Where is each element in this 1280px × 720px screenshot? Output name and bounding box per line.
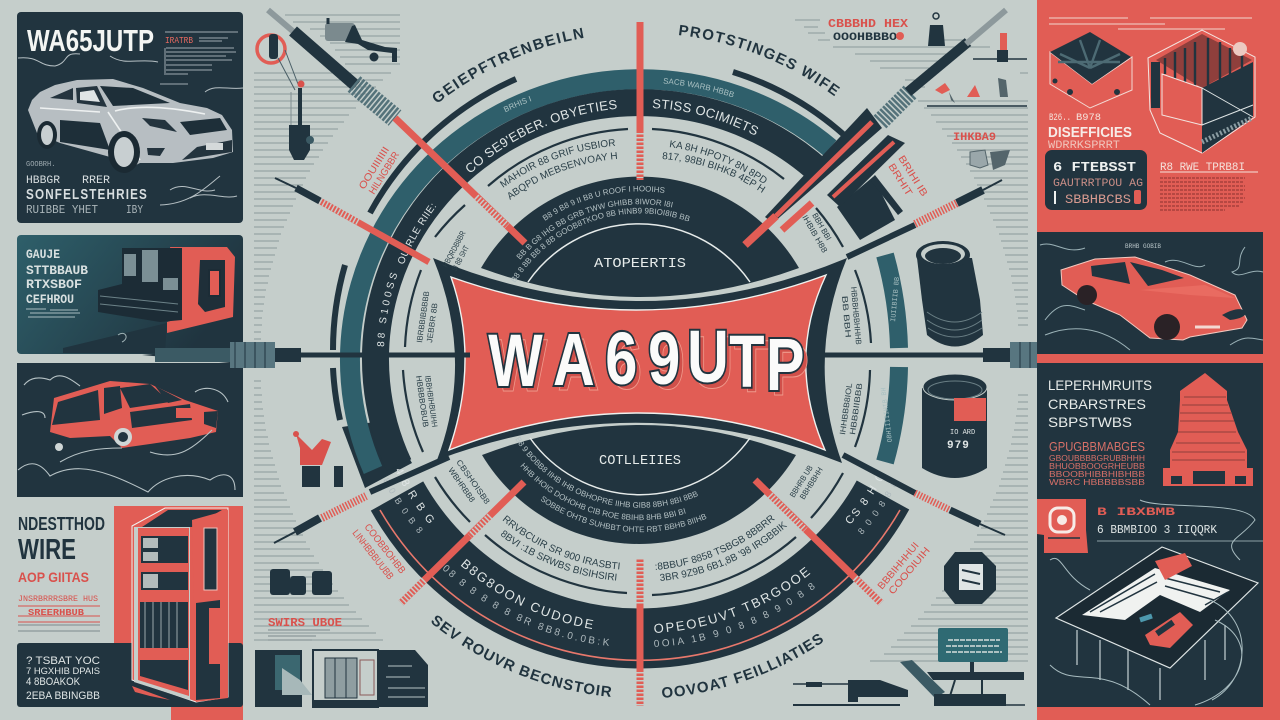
band text: 88 S100SS (377, 272, 397, 346)
rotated side labels: SI 8B SHT (450, 244, 471, 273)
text: right caption with paragraph: R8 RWE TPRB8I (1160, 162, 1245, 174)
icon: can top right (916, 241, 983, 346)
top rules (1049, 18, 1252, 29)
rotated side labels: BBH BBI (810, 212, 833, 242)
teal labels: BRHIS I (504, 96, 532, 112)
text: red panel captions: DISEFFICIES (1048, 124, 1132, 141)
red tab (1037, 499, 1088, 553)
can label: IO ARD (950, 429, 975, 437)
rotated side labels: IBRBBIBBBBB (415, 291, 431, 343)
icon: small gun bottom right (793, 680, 908, 705)
car illustration (1061, 257, 1247, 340)
panel captions: SONFELSTEHRIES (26, 186, 148, 203)
building (1163, 373, 1253, 486)
rotated side labels: HBBBHBBHHHB (849, 286, 863, 345)
band text: 4 8 R B G R H (396, 469, 434, 523)
inner curved text blocks: KA 8H HPOTY 8N 8PD (670, 140, 767, 183)
label: red code top right: CBBBHD HEX (828, 17, 909, 31)
car illustration (28, 79, 233, 173)
teal labels (504, 78, 734, 112)
title: WA69UTP (488, 316, 804, 407)
text block: note (160, 32, 238, 84)
red text lines: BHUOBBOOGRHEUBB (1049, 462, 1145, 471)
text panel: dark box: GAUTRRTPOU AG (1053, 178, 1143, 190)
inner curved text blocks: 8BVI :1B SRWBS BISIHSIRI (501, 530, 617, 580)
rotated side labels: HBBBIIBBB (848, 383, 864, 435)
text: red panel captions: B978 (1076, 113, 1101, 124)
panel: building (1037, 363, 1263, 500)
red text lines: JNSRBRRRSBRE HUS (18, 595, 98, 604)
band text: 8 0 0 8 8 8 (858, 484, 896, 534)
pen: upper left (275, 178, 429, 262)
text: red panel captions: B26.. (1049, 113, 1071, 124)
rotated side labels: COOOIUIH (887, 545, 933, 597)
label: red code top right (828, 17, 996, 144)
label: red bottom-left (268, 616, 342, 640)
band text (377, 99, 758, 346)
title: WA69UTP (493, 322, 809, 412)
red text lines: BBOOBHIBBHIBHBB (1049, 470, 1145, 479)
panel captions: RRER (82, 175, 110, 187)
red label: B IBXBMB (1097, 507, 1176, 519)
rotated side labels: HBBBBOBUB (414, 375, 430, 428)
panel captions: IBY (126, 203, 143, 217)
cabinet illustration (132, 508, 228, 702)
red ring with clip (257, 34, 285, 63)
rotated side labels: IHBIB H88 (800, 214, 829, 255)
text panel: dark box: 6 FTEBSST (1053, 160, 1136, 176)
panel: silver car (17, 12, 243, 223)
red text lines: GBOUBBBBGRUBBHHH (1049, 454, 1145, 463)
text block: STTBBAUB (26, 263, 88, 278)
footer text: 4 8BOAKOK (26, 676, 81, 688)
heading: WIRE: WIRE (18, 534, 76, 566)
bottom red strip (171, 707, 243, 720)
heading text: LEPERHMRUITS (1048, 377, 1152, 393)
panel captions: HBBGR (26, 175, 60, 187)
text block: CEFHROU (26, 292, 74, 307)
dome small text: B8 9 B8 9 II B8 U ROOF I HOOIHS (542, 186, 665, 221)
rotated side labels: BBHBBHH (798, 466, 825, 501)
cloud outlines (1040, 244, 1263, 350)
red text lines (18, 595, 100, 631)
curved heading: top left: GEIEPFTRENBEILN (432, 28, 584, 102)
rotated side labels: IBBHBIHBUIHH (423, 375, 439, 428)
band text (384, 469, 896, 647)
red text lines (1049, 439, 1145, 487)
isometric open box (1148, 30, 1255, 153)
rules (26, 309, 80, 317)
inner curved text blocks: RRVBCUIR SR 900 IRASBTI GB (502, 515, 620, 570)
band text: 0OIA 1B 9 0 8 8 8 9 0 8 8 (654, 583, 815, 647)
label: red code top right: OOOHBBBO (833, 32, 897, 44)
text block: GAUJE (26, 247, 60, 262)
panel: red van (17, 363, 243, 497)
text block: RTXSBOF (26, 277, 82, 292)
footer text: 2EBA BBINGBB (26, 690, 100, 702)
dome small text: B8 8 8B BB 8 8B GOOB8TKOO 8B HINB9 9BIOI8IB BB (510, 208, 690, 282)
icon: octagon bottom right (944, 552, 996, 604)
curved heading: bottom right: OOVOAT FEILLIATIES (662, 634, 823, 698)
panel: red cabinet and wire text (17, 506, 243, 720)
teal segment labels: IUIIBIIB BB (890, 277, 902, 322)
rotated side labels: LINHBBBUUBB (350, 528, 395, 582)
text panel: dark box: SBBHBCBS (1065, 192, 1131, 207)
band text: OUIRLE RIIE: (398, 204, 436, 264)
ring: inner thin arcs (403, 129, 871, 595)
label: red bottom-left: SWIRS UBOE (268, 616, 342, 630)
red marker: bottom left (401, 482, 524, 603)
icon: bottle, lipstick and small tools top right (927, 13, 1027, 170)
inner curved text blocks: :8BBUF 8858 TSBGB 8BBRR (655, 515, 775, 570)
dome small text: HHB IHOIG DOHOHB CIB ROE 8BIHB 8HB BBI BI (520, 462, 686, 520)
dark wedge: upper right (837, 175, 903, 240)
red text lines: WBRC HBBBBBSBB (1049, 478, 1145, 487)
panel captions: GOOBRH. (26, 161, 55, 169)
machine (63, 248, 225, 353)
dome: top (481, 176, 799, 297)
pen: top left (268, 10, 525, 243)
heading: NDESTIHOD: NDESTTHOD (18, 514, 105, 534)
heading text (1048, 377, 1152, 430)
white label: 6 BBMBIOO 3 IIQQRK (1097, 523, 1218, 537)
ring: outer thin arcs (333, 72, 843, 420)
ring: top dark band (362, 89, 822, 460)
band text: CS 8 H 0 0 : (846, 476, 882, 524)
text: red panel captions: WDRRKSPRRT (1048, 140, 1120, 152)
label: red code top right: IHKBA9 (953, 132, 996, 144)
dome: bottom (482, 425, 796, 544)
red marker: centre top (636, 22, 644, 180)
text panel: dark box (1045, 150, 1147, 210)
rotated side labels: OOUIIIIIII (357, 145, 392, 192)
decorative smoke lines (18, 54, 243, 205)
teal labels: SACB WARB HBBB (664, 78, 734, 97)
heading text: CRBARSTRES (1048, 396, 1146, 412)
thick pen: top right (745, 10, 1006, 245)
icon: small blocks bottom-left (270, 569, 332, 595)
ring: right teal segment (880, 255, 902, 462)
dome small text: SOBBE OHTB SUHBBT OHTE RBT BBHB 8IIHB (540, 496, 706, 532)
curved heading: top right: PROTSTINGES WIFE (679, 24, 840, 96)
icon: bucket and tool left (293, 431, 343, 487)
cable lines (1050, 500, 1255, 705)
curved heading: bottom left: SEV ROUVR BECNSTOIR (432, 616, 611, 697)
pen: lower right (843, 455, 1005, 535)
band text: STISS OCIMIETS (652, 99, 758, 135)
red text lines: GPUGBBMABGES (1049, 439, 1145, 454)
ring: right teal segment: OBHIIIIIHIB BH (880, 387, 895, 443)
cloud outlines (18, 376, 235, 492)
ring: lower-left dark wedge (342, 420, 412, 488)
panel captions (26, 161, 148, 217)
dome small text: B8 9 BOBB8 IIHB IHB OBHOPRE IIHB GIB8 8BH 8BI 8BB (516, 436, 698, 508)
rotated side labels: BRHIT (885, 162, 914, 198)
red marker: bottom right (755, 480, 881, 603)
icon: desk and monitor bottom right (900, 628, 1025, 705)
hatch lines: left of the ring (254, 15, 400, 640)
rotated side labels: BRIHI IB (895, 154, 929, 199)
rotated side labels: HBQRDB8BR (441, 229, 468, 269)
text block (26, 247, 88, 307)
panel: teal machine (17, 235, 243, 354)
heading text: SBPSTWBS (1048, 414, 1132, 430)
panel: red car (1037, 232, 1263, 354)
icon: can with red label (922, 374, 987, 478)
icon: top-left tools (257, 18, 397, 160)
can number: 979 (947, 440, 970, 452)
heading: panel title: WA65JUTP (27, 23, 154, 58)
panel captions: RUIBBE YHET (26, 203, 98, 217)
isometric block (1050, 32, 1132, 108)
hatch lines: right of the ring (795, 20, 1028, 661)
dark footer (17, 643, 243, 707)
pen: centre left (142, 342, 470, 368)
rotated side labels: BBBIHHHUI (876, 540, 922, 592)
rotated side labels: WBHRBB8 (446, 466, 477, 504)
teal labels: RBD RSQ GBIIHS (391, 192, 430, 255)
panel: right red column (1037, 0, 1280, 720)
rotated side labels: IHHBBB8IOL (838, 382, 854, 435)
centre banner (433, 258, 847, 463)
red sub-heading: AOP GIITAS (18, 569, 89, 585)
rotated side labels: BB BBH (840, 295, 853, 338)
band text: B8G8OON CUDODE (460, 558, 594, 629)
icon: machine bottom-left (255, 650, 428, 707)
pen: centre right (810, 342, 1148, 368)
text: red panel captions (1048, 113, 1132, 152)
red text lines: SREERHBUB (28, 608, 85, 618)
footer text (26, 655, 100, 702)
label: red tag: IRATRB (165, 36, 194, 46)
inner curved text blocks: 3BR 9Z9B 6B1,8B '98 IRGBBIK (660, 521, 788, 581)
text: right caption with paragraph (1160, 162, 1258, 210)
footer text: 7 HGXHIB DPAIS (26, 666, 100, 676)
rotated side labels: BBHRB UB (788, 464, 815, 499)
inner curved text blocks (500, 139, 788, 581)
rotated side labels: CBSHOISB8 (454, 458, 492, 506)
platform (1056, 547, 1258, 700)
red backdrop (114, 506, 243, 707)
red marker: centre bottom (636, 558, 644, 706)
red machine cover (167, 247, 235, 333)
dome small text: BB B G8 IHG BB GRB TWW GHIBB 8IWOR I8I (516, 198, 673, 260)
rotated side labels: COOBBOHBB (362, 522, 407, 576)
label: BRHB GOBIB (1125, 243, 1161, 250)
rotated side labels: HILNGBBR (367, 150, 402, 197)
pen: upper right (847, 180, 1002, 257)
cart (325, 18, 397, 62)
band text: OPEOEUVT TBRGOOEOR (654, 566, 810, 633)
dome title: COTLLEIIES (599, 453, 681, 469)
van illustration (50, 381, 218, 451)
ring: teal band (340, 69, 836, 474)
rotated side labels (350, 145, 933, 597)
hanging gauge (278, 50, 314, 160)
band text: CO SE9'EBER. OBYETIES (466, 100, 617, 172)
band text: 8 0 B 0 B 8 8 (384, 478, 422, 533)
footer text: ? TSBAT YOC (26, 655, 100, 667)
rotated side labels: JEBBR 8B (425, 302, 440, 343)
dome title: ATOPEERTIS (594, 256, 686, 272)
ring: bottom dark band (370, 469, 910, 668)
panel: platform diagram (1037, 499, 1263, 707)
pen: lower left (274, 457, 449, 543)
band text: 08 8 8 8 8 8 8R 8B8.0.0B:K (443, 565, 610, 646)
